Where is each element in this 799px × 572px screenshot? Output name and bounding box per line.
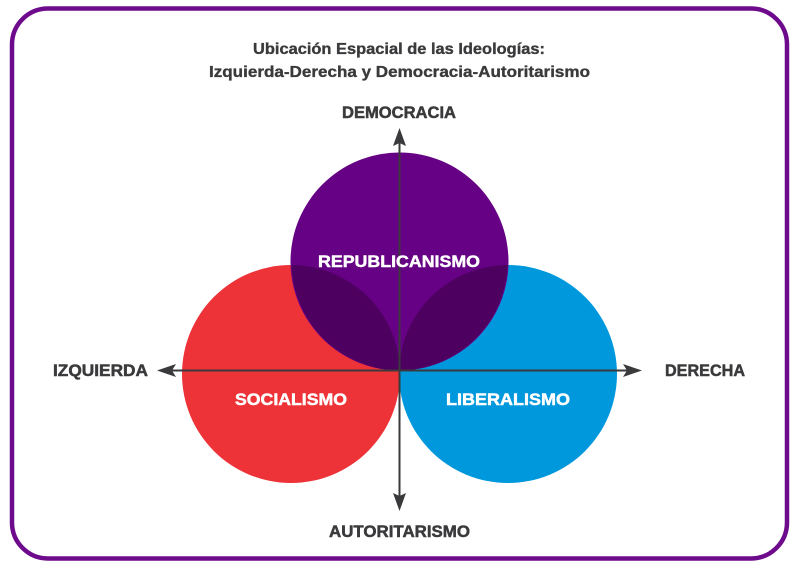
circle: socialismo bbox=[182, 265, 400, 483]
vertical axis arrow bbox=[393, 128, 406, 511]
horizontal axis arrow bbox=[157, 364, 642, 377]
label: socialismo: SOCIALISMO bbox=[235, 390, 347, 409]
overlap: republicanismo and liberalismo bbox=[399, 265, 507, 374]
axis label: democracia: DEMOCRACIA bbox=[342, 104, 456, 122]
label: republicanismo: REPUBLICANISMO bbox=[318, 252, 480, 271]
axis label: izquierda: IZQUIERDA bbox=[53, 362, 148, 380]
title: Izquierda-Derecha y Democracia-Autoritarismo bbox=[209, 64, 590, 81]
title: Ubicación Espacial de las Ideologías: bbox=[253, 41, 545, 58]
overlap: republicanismo and socialismo bbox=[292, 265, 400, 374]
circle: republicanismo bbox=[290, 152, 508, 370]
label: liberalismo: LIBERALISMO bbox=[446, 390, 570, 409]
circle: liberalismo bbox=[399, 265, 617, 483]
axis label: autoritarismo: AUTORITARISMO bbox=[329, 523, 470, 541]
title bbox=[209, 41, 590, 81]
axis label: derecha: DERECHA bbox=[665, 362, 745, 380]
